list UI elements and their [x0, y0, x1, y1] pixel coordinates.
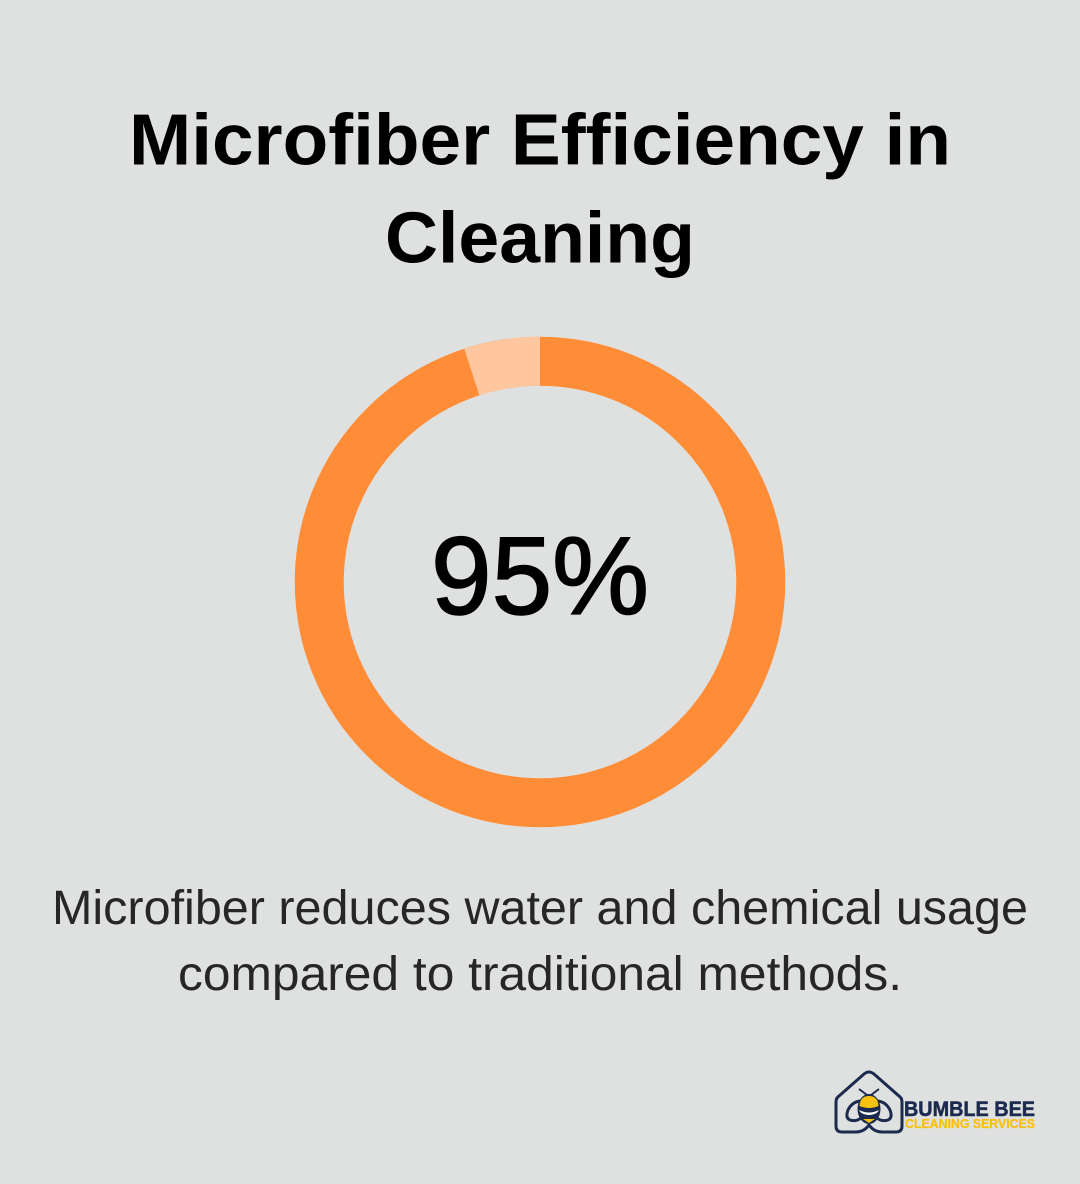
description text: Microfiber reduces water and chemical usage: [52, 882, 1028, 935]
donut chart: 95%: [319, 361, 761, 803]
donut value: 95%: [431, 515, 649, 638]
title: Cleaning: [385, 198, 695, 278]
description text: [52, 882, 1028, 1001]
logo: Bumble Bee Cleaning Services: [836, 1072, 1035, 1132]
logo tagline: CLEANING SERVICES: [905, 1117, 1035, 1131]
title: [129, 100, 951, 278]
description text: compared to traditional methods.: [178, 948, 902, 1001]
title: Microfiber Efficiency in: [129, 100, 951, 180]
logo wordmark: BUMBLE BEE: [904, 1098, 1035, 1121]
icon: house with bee: [836, 1072, 902, 1132]
